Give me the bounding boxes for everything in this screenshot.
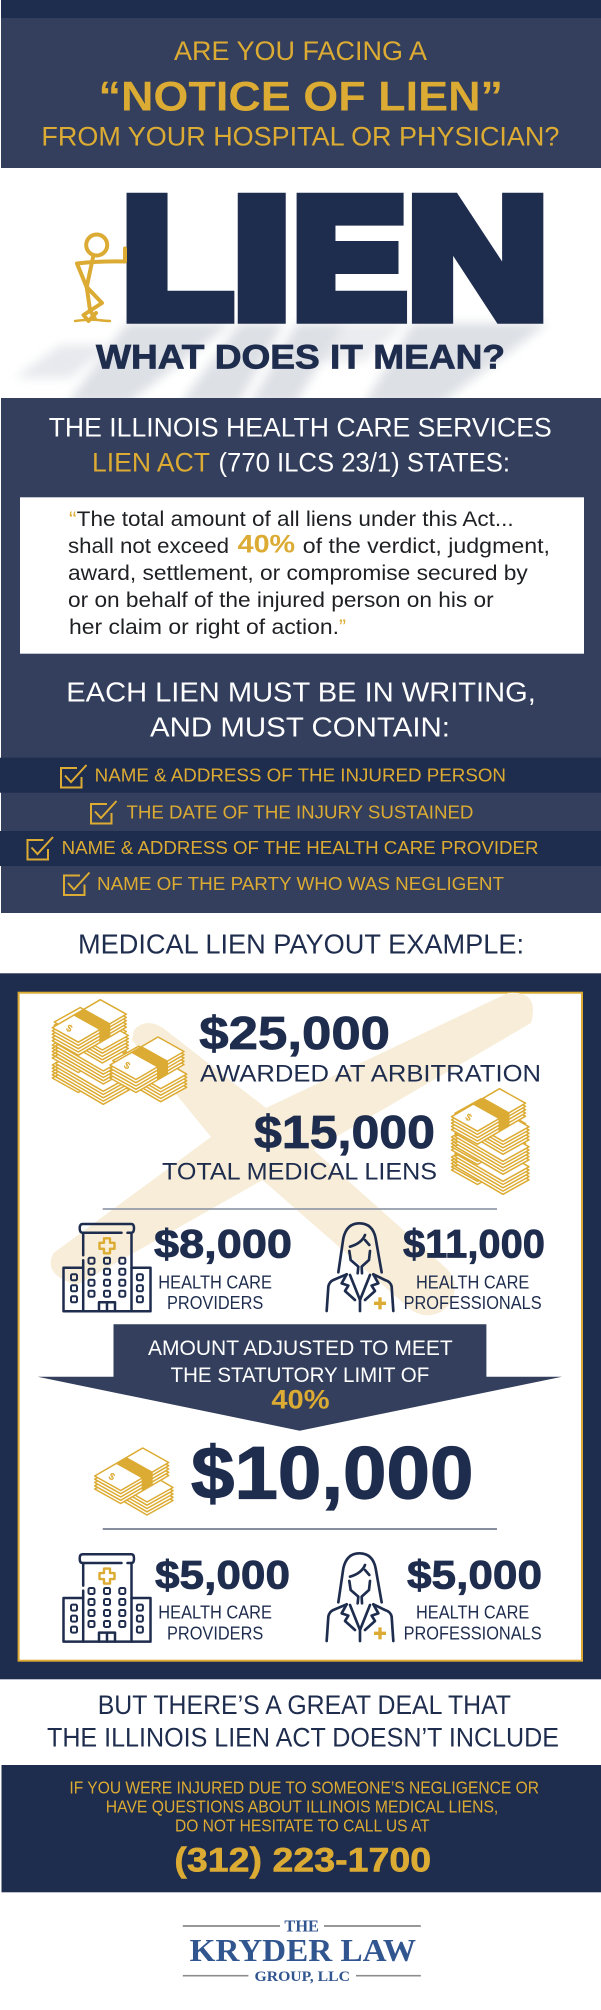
checklist row 4: NAME OF THE PARTY WHO WAS NEGLIGENT: [97, 873, 504, 894]
call to action text: HAVE QUESTIONS ABOUT ILLINOIS MEDICAL LIENS,: [106, 1796, 498, 1816]
phone number: (312) 223-1700: [174, 1842, 431, 1880]
label: health care providers: [158, 1272, 272, 1313]
logo: The Kryder Law Group: KRYDER LAW: [190, 1932, 416, 1968]
icon: money stack small: [95, 1448, 173, 1515]
label: health care professionals second: [404, 1602, 542, 1643]
big word LIEN: E: [292, 164, 407, 354]
icon: money stacks large: [52, 1000, 187, 1104]
quote box: The total amount of all liens under this Act...: [77, 508, 514, 531]
statute heading: (770 ILCS 23/1) STATES:: [218, 448, 510, 478]
watermark check mark: [51, 993, 533, 1315]
label: health care professionals: HEALTH CARE: [416, 1272, 529, 1292]
statute heading: THE ILLINOIS HEALTH CARE SERVICES: [49, 413, 552, 443]
heading line 1: ARE YOU FACING A: [174, 36, 427, 66]
quote box: “: [69, 508, 77, 531]
quote box: 40%: [238, 530, 295, 558]
logo: The Kryder Law Group: THE: [284, 1917, 319, 1936]
panel: header: [1, 18, 601, 168]
label: awarded at arbitration: AWARDED AT ARBITRATION: [200, 1061, 541, 1088]
label: health care professionals: PROFESSIONALS: [404, 1293, 542, 1313]
quote box: ”: [339, 616, 346, 639]
logo: The Kryder Law Group: GROUP, LLC: [254, 1969, 350, 1985]
panel: statute: [0, 398, 601, 913]
icon: doctor: [327, 1223, 393, 1311]
call to action text: DO NOT HESITATE TO CALL US AT: [175, 1815, 430, 1835]
quote box: or on behalf of the injured person on his or: [68, 589, 494, 612]
requirements heading: EACH LIEN MUST BE IN WRITING,: [66, 677, 536, 708]
shadow under LIEN: [15, 323, 548, 404]
checklist row 1: [0, 758, 601, 793]
label: health care providers: PROVIDERS: [167, 1293, 263, 1313]
heading line 2: “NOTICE OF LIEN”: [98, 73, 503, 120]
quote box: award, settlement, or compromise secured by: [68, 562, 528, 585]
statute heading: LIEN ACT: [92, 448, 210, 478]
quote box: her claim or right of action.: [69, 616, 339, 639]
icon: money stack column: [452, 1089, 529, 1194]
quote box: [20, 497, 584, 654]
quote box: of the verdict, judgment,: [303, 535, 550, 558]
quote box: shall not exceed: [68, 535, 229, 558]
checklist row 2: THE DATE OF THE INJURY SUSTAINED: [126, 801, 473, 822]
label: health care providers second: PROVIDERS: [167, 1623, 263, 1643]
arrow: adjusted amount: AMOUNT ADJUSTED TO MEET: [148, 1337, 453, 1360]
top band: [1, 0, 601, 18]
amount: 5,000 professionals: $5,000: [407, 1553, 542, 1597]
amount: 5,000 providers: $5,000: [155, 1553, 290, 1597]
arrow: adjusted amount: THE STATUTORY LIMIT OF: [171, 1364, 429, 1387]
amount: 8,000: $8,000: [154, 1222, 292, 1266]
requirements heading: AND MUST CONTAIN:: [150, 712, 450, 743]
logo: The Kryder Law Group: [183, 1917, 421, 1985]
panel: call to action: [2, 1765, 601, 1892]
label: health care professionals second: HEALTH CARE: [416, 1602, 529, 1622]
heading: payout example: MEDICAL LIEN PAYOUT EXAMPLE:: [78, 928, 524, 959]
text block: what the act doesn't include: THE ILLINOIS LIEN ACT DOESN’T INCLUDE: [47, 1723, 559, 1753]
call to action text: [69, 1777, 539, 1835]
label: health care professionals second: PROFESSIONALS: [404, 1623, 542, 1643]
text block: what the act doesn't include: [47, 1690, 559, 1753]
icon: hospital: [64, 1224, 150, 1311]
label: health care providers second: [158, 1602, 272, 1643]
call to action text: IF YOU WERE INJURED DUE TO SOMEONE’S NEGLIGENCE OR: [69, 1777, 539, 1797]
amount: 15,000: $15,000: [254, 1106, 435, 1158]
big word LIEN: I: [232, 164, 291, 354]
big word LIEN: L: [122, 164, 232, 354]
big word LIEN: N: [407, 164, 548, 354]
heading line 3: FROM YOUR HOSPITAL OR PHYSICIAN?: [41, 121, 559, 151]
subheading: WHAT DOES IT MEAN?: [96, 338, 505, 376]
requirements heading: [66, 677, 536, 743]
big word LIEN: [122, 164, 549, 354]
label: health care providers second: HEALTH CARE: [158, 1602, 272, 1622]
amount: 25,000: $25,000: [199, 1007, 390, 1059]
text block: what the act doesn't include: BUT THERE’S A GREAT DEAL THAT: [98, 1690, 511, 1720]
amount: 11,000: $11,000: [403, 1222, 545, 1266]
checklist row 1: NAME & ADDRESS OF THE INJURED PERSON: [95, 765, 506, 786]
icon: doctor second: [327, 1553, 393, 1641]
checklist row 3: NAME & ADDRESS OF THE HEALTH CARE PROVIDER: [62, 837, 538, 858]
label: total medical liens: TOTAL MEDICAL LIENS: [162, 1158, 437, 1185]
icon: stick figure leaning on the word: [75, 234, 125, 321]
statute heading: [49, 413, 552, 478]
label: health care professionals: [404, 1272, 542, 1313]
arrow: adjusted amount: [38, 1324, 562, 1431]
checklist row 3: [0, 831, 601, 866]
panel: payout example: [0, 973, 601, 1679]
label: health care providers: HEALTH CARE: [158, 1272, 272, 1292]
amount: 10,000: $10,000: [191, 1431, 473, 1514]
icon: hospital second: [64, 1554, 150, 1642]
arrow: adjusted amount: 40%: [271, 1384, 330, 1414]
